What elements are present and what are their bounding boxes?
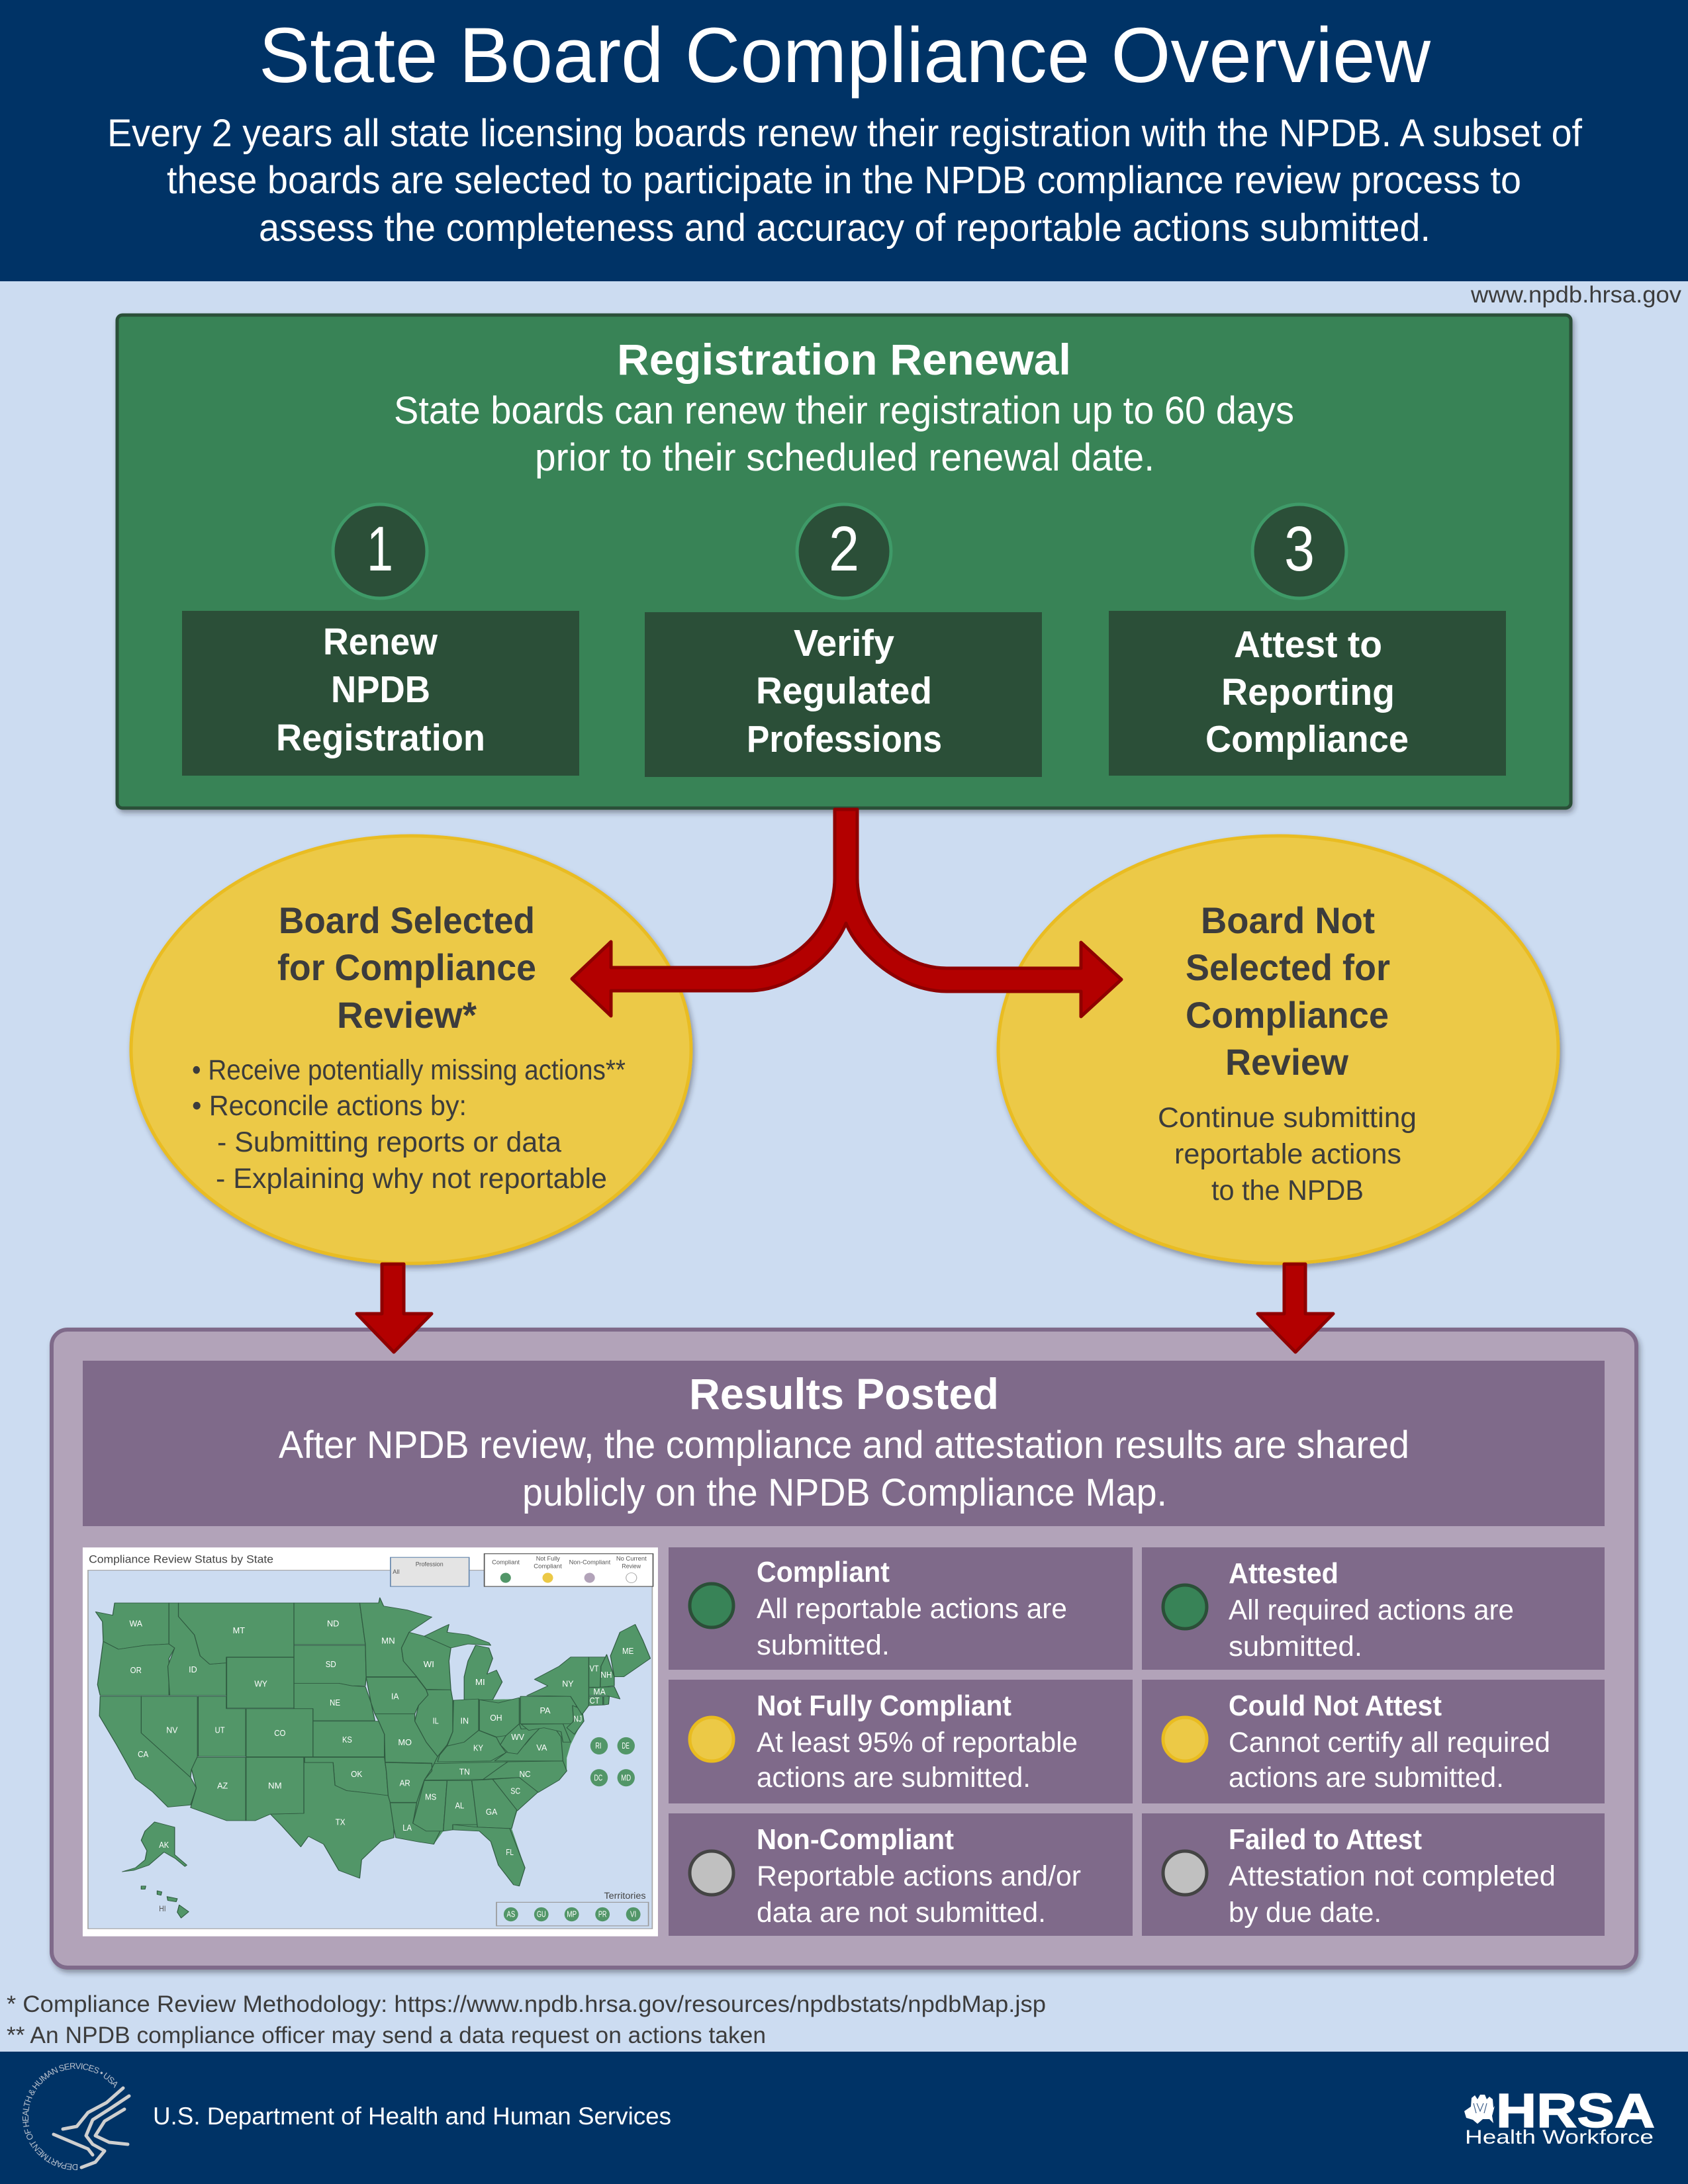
compliance map screenshot: MO xyxy=(398,1739,412,1747)
step 2 box: Verify xyxy=(794,622,894,664)
status: attested: Attested xyxy=(1229,1557,1338,1590)
results header: After NPDB review, the compliance and attestation results are shared xyxy=(279,1424,1409,1467)
compliance map screenshot: NH xyxy=(600,1671,612,1680)
panel: registration renewal xyxy=(117,315,1571,808)
compliance map screenshot: VI xyxy=(630,1910,636,1919)
compliance map screenshot: IL xyxy=(433,1717,439,1726)
compliance map screenshot: NE xyxy=(330,1699,340,1707)
heading: board selected: for Compliance xyxy=(277,946,536,988)
status: failed to attest: Attestation not completed xyxy=(1229,1860,1556,1892)
step 2 box xyxy=(645,612,1042,777)
heading: board not selected: Review xyxy=(1225,1041,1348,1083)
compliance map screenshot: Profession xyxy=(416,1561,444,1568)
compliance map screenshot: FL xyxy=(506,1848,514,1857)
renewal description: State boards can renew their registration up to 60 days xyxy=(394,389,1294,432)
review steps: - Submitting reports or data xyxy=(217,1126,561,1158)
header banner xyxy=(0,0,1688,281)
review steps: • Reconcile actions by: xyxy=(192,1090,467,1122)
status: non-compliant: data are not submitted. xyxy=(757,1897,1046,1929)
continue submitting note: reportable actions xyxy=(1174,1138,1401,1170)
compliance map screenshot: KS xyxy=(342,1735,352,1745)
results header xyxy=(83,1361,1605,1526)
icon: hhs seal: DEPARTMENT OF HEALTH & HUMAN SERVICES • USA xyxy=(23,2063,118,2170)
compliance map screenshot: SC xyxy=(510,1787,520,1796)
compliance map screenshot: MA xyxy=(593,1688,606,1697)
footer band xyxy=(0,2052,1688,2184)
arrow: selected to results xyxy=(357,1264,432,1352)
status: attested: submitted. xyxy=(1229,1631,1362,1662)
compliance map screenshot: MT xyxy=(233,1626,245,1635)
compliance map screenshot: All xyxy=(393,1568,400,1576)
step 1 number: 1 xyxy=(367,514,393,584)
step 1 box xyxy=(182,611,579,776)
status: could not attest: Could Not Attest xyxy=(1229,1690,1442,1722)
review steps xyxy=(192,1054,626,1195)
compliance map screenshot: NC xyxy=(519,1770,531,1779)
status: failed to attest: by due date. xyxy=(1229,1897,1382,1929)
status: attested xyxy=(1142,1547,1605,1670)
status: could not attest xyxy=(1142,1680,1605,1803)
compliance map screenshot: GA xyxy=(486,1807,498,1817)
compliance map screenshot: ND xyxy=(327,1619,339,1629)
compliance map screenshot: ID xyxy=(189,1666,197,1674)
intro text: assess the completeness and accuracy of reportable actions submitted. xyxy=(259,206,1430,250)
heading: board selected: Board Selected xyxy=(279,899,535,941)
compliance map screenshot: Compliance Review Status by State xyxy=(89,1553,273,1566)
compliance map screenshot: NM xyxy=(268,1782,282,1791)
status: compliant: submitted. xyxy=(757,1629,890,1661)
compliance map screenshot: RI xyxy=(595,1741,601,1751)
oval: board not selected xyxy=(998,836,1558,1263)
title: State Board Compliance Overview xyxy=(259,12,1431,99)
step 3 box: Reporting xyxy=(1221,671,1395,713)
compliance map screenshot: LA xyxy=(402,1824,412,1833)
compliance map screenshot: TN xyxy=(459,1768,470,1777)
compliance map screenshot: AK xyxy=(159,1841,169,1850)
compliance map screenshot: MS xyxy=(425,1793,436,1802)
compliance map screenshot: Review xyxy=(622,1563,641,1570)
compliance map screenshot: ME xyxy=(622,1647,633,1656)
heading: board not selected: Compliance xyxy=(1186,994,1389,1036)
compliance map screenshot: WV xyxy=(511,1733,524,1742)
website url: www.npdb.hrsa.gov xyxy=(1470,282,1682,308)
review steps: - Explaining why not reportable xyxy=(216,1163,607,1195)
step 1 number xyxy=(333,504,427,598)
footnotes: * Compliance Review Methodology: https://www.npdb.hrsa.gov/resources/npdbstats/npdbMap.jsp xyxy=(7,1991,1046,2017)
intro text xyxy=(107,112,1583,250)
compliance map screenshot: WY xyxy=(254,1680,267,1689)
compliance map screenshot: Territories xyxy=(604,1890,646,1901)
compliance map screenshot: VA xyxy=(536,1744,547,1752)
compliance map screenshot: PA xyxy=(539,1706,551,1715)
compliance map screenshot: AS xyxy=(507,1910,515,1919)
arrow: not selected to results xyxy=(1258,1264,1333,1352)
compliance map screenshot: NV xyxy=(166,1726,178,1735)
compliance map screenshot: DE xyxy=(622,1741,630,1751)
compliance map screenshot: OH xyxy=(490,1714,502,1723)
status: non-compliant: Non-Compliant xyxy=(757,1823,954,1856)
step 1 box: Registration xyxy=(276,717,485,759)
compliance map screenshot: NJ xyxy=(574,1715,582,1724)
compliance map screenshot: GU xyxy=(537,1910,546,1919)
step 3 box xyxy=(1109,611,1506,776)
continue submitting note xyxy=(1158,1102,1417,1206)
status: failed to attest: Failed to Attest xyxy=(1229,1823,1422,1856)
footnotes: ** An NPDB compliance officer may send a data request on actions taken xyxy=(7,2023,766,2048)
compliance map screenshot: CO xyxy=(274,1729,285,1738)
compliance map screenshot: Compliant xyxy=(534,1563,562,1570)
status: failed to attest xyxy=(1142,1813,1605,1936)
status: compliant: Compliant xyxy=(757,1556,890,1588)
renewal description: prior to their scheduled renewal date. xyxy=(535,436,1154,479)
compliance map screenshot xyxy=(83,1547,658,1936)
compliance map screenshot: VT xyxy=(590,1664,599,1674)
heading: board not selected xyxy=(1186,899,1390,1083)
compliance map screenshot: MI xyxy=(475,1678,485,1687)
oval: board selected xyxy=(131,836,691,1263)
compliance map screenshot: TX xyxy=(336,1818,346,1827)
compliance map screenshot: IA xyxy=(391,1692,399,1702)
status: attested: All required actions are xyxy=(1229,1594,1514,1626)
compliance map screenshot: AZ xyxy=(217,1782,228,1791)
step 3 box: Compliance xyxy=(1205,718,1409,760)
compliance map screenshot: HI xyxy=(159,1905,166,1913)
panel: results posted xyxy=(52,1330,1636,1968)
footnotes xyxy=(7,1991,1046,2048)
heading: board not selected: Selected for xyxy=(1186,946,1390,988)
logo: hrsa health workforce: HRSA xyxy=(1496,2085,1655,2138)
renewal description xyxy=(394,389,1294,479)
results header: publicly on the NPDB Compliance Map. xyxy=(522,1471,1167,1514)
status: non-compliant xyxy=(669,1813,1133,1936)
step 2 box: Professions xyxy=(747,718,942,760)
step 2 box: Regulated xyxy=(756,670,932,712)
step 2 number xyxy=(797,504,891,598)
step 3 number xyxy=(1252,504,1346,598)
compliance map screenshot: NY xyxy=(562,1680,574,1689)
compliance map screenshot: SD xyxy=(326,1660,336,1669)
status: could not attest: actions are submitted. xyxy=(1229,1762,1504,1794)
compliance map screenshot: CT xyxy=(590,1697,600,1706)
compliance map screenshot: WI xyxy=(424,1660,434,1669)
results header: Results Posted xyxy=(689,1369,999,1418)
continue submitting note: Continue submitting xyxy=(1158,1102,1417,1134)
compliance map screenshot: PR xyxy=(598,1910,606,1919)
logo: hrsa health workforce: Health Workforce xyxy=(1465,2126,1654,2148)
icon: hrsa map and people xyxy=(1464,2095,1495,2124)
logo: hrsa health workforce xyxy=(1464,2085,1655,2148)
compliance map screenshot: No Current xyxy=(616,1555,647,1562)
status: could not attest: Cannot certify all required xyxy=(1229,1727,1550,1758)
arrow: branching from renewal to both ovals xyxy=(572,809,1121,1017)
compliance map screenshot: AR xyxy=(400,1779,410,1788)
status: not fully compliant: actions are submitted. xyxy=(757,1762,1031,1794)
compliance map screenshot: AL xyxy=(455,1801,464,1811)
compliance map screenshot: OR xyxy=(130,1666,142,1675)
compliance map screenshot: WA xyxy=(130,1619,142,1629)
compliance map screenshot: KY xyxy=(473,1744,483,1753)
compliance map screenshot: OK xyxy=(351,1770,363,1779)
step 1 box: Renew xyxy=(323,621,438,663)
compliance map screenshot: Compliant xyxy=(492,1559,520,1566)
status: non-compliant: Reportable actions and/or xyxy=(757,1860,1081,1892)
compliance map screenshot: CA xyxy=(138,1750,149,1759)
status: not fully compliant xyxy=(669,1680,1133,1803)
intro text: Every 2 years all state licensing boards renew their registration with the NPDB. A subset of xyxy=(107,112,1583,155)
heading: board selected xyxy=(277,899,536,1036)
step 2 number: 2 xyxy=(829,514,859,584)
compliance map screenshot: MP xyxy=(567,1910,577,1919)
department name: U.S. Department of Health and Human Services xyxy=(153,2103,671,2130)
step 3 box: Attest to xyxy=(1234,623,1382,666)
heading: board not selected: Board Not xyxy=(1201,899,1375,941)
heading: board selected: Review* xyxy=(337,994,477,1036)
status: not fully compliant: At least 95% of reportable xyxy=(757,1727,1078,1758)
step 1 box: NPDB xyxy=(331,668,430,711)
intro text: these boards are selected to participate in the NPDB compliance review process to xyxy=(167,159,1521,202)
compliance map screenshot: UT xyxy=(215,1726,225,1735)
compliance map screenshot: MN xyxy=(381,1637,395,1646)
compliance map screenshot: IN xyxy=(460,1717,469,1726)
status: not fully compliant: Not Fully Compliant xyxy=(757,1690,1011,1722)
step 3 number: 3 xyxy=(1284,514,1315,584)
heading: registration renewal: Registration Renewal xyxy=(617,335,1071,384)
status: compliant xyxy=(669,1547,1133,1670)
review steps: • Receive potentially missing actions** xyxy=(192,1054,626,1086)
compliance map screenshot: DC xyxy=(594,1774,602,1783)
compliance map screenshot: Not Fully xyxy=(536,1555,560,1562)
continue submitting note: to the NPDB xyxy=(1211,1175,1364,1206)
status: compliant: All reportable actions are xyxy=(757,1593,1067,1625)
compliance map screenshot: MD xyxy=(621,1774,631,1783)
compliance map screenshot: Non-Compliant xyxy=(569,1559,611,1566)
